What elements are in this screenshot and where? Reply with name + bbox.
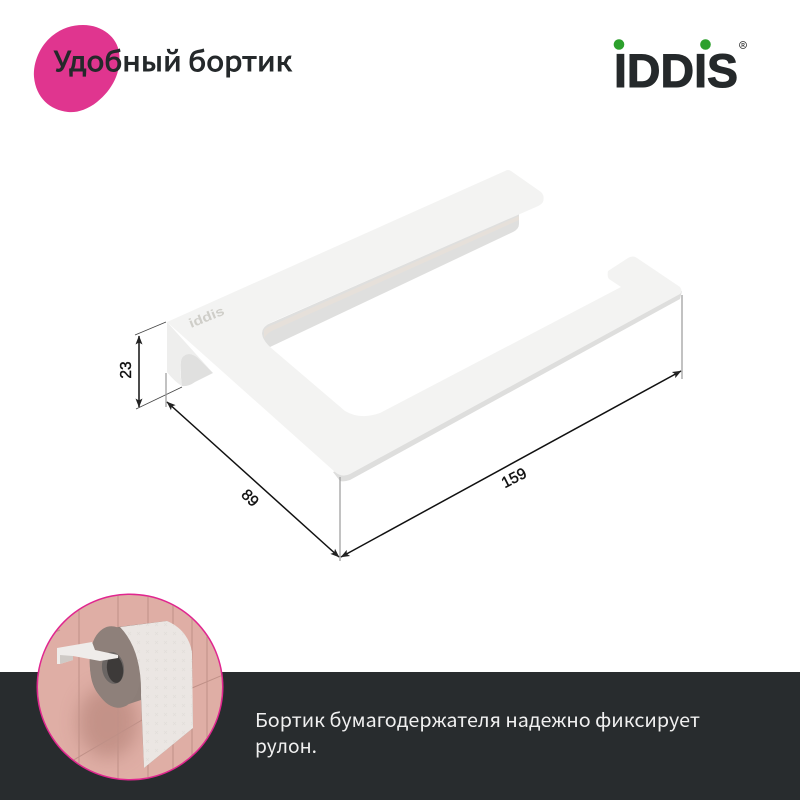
caption text: рулон.	[255, 732, 317, 759]
photo: toilet roll on holder	[36, 594, 224, 780]
holder top surface	[167, 170, 682, 476]
dimension 89	[166, 373, 340, 561]
dimension 159: 159	[499, 465, 530, 492]
bottom dark band	[0, 672, 800, 800]
logo: IDDIS: R	[741, 43, 745, 49]
photo tile wall	[38, 595, 222, 779]
photo holder	[57, 642, 118, 664]
heading: Удобный бортик	[34, 25, 292, 112]
heading: Удобный бортик: Удобный бортик	[54, 40, 292, 79]
caption text	[255, 706, 700, 759]
photo paper	[120, 621, 193, 768]
holder engraved brand: iddis	[187, 303, 226, 331]
holder front side	[167, 322, 213, 386]
holder inner groove	[262, 214, 519, 347]
holder lower edge thickness	[333, 291, 682, 481]
caption text: Бортик бумагодержателя надежно фиксирует	[255, 706, 700, 733]
dimension 159	[341, 295, 682, 557]
dimension 23	[118, 322, 182, 409]
dimension 89: 89	[238, 486, 262, 510]
dimension 23: 23	[118, 361, 135, 379]
photo roll	[90, 621, 193, 768]
logo: IDDIS: IDDIS	[614, 44, 738, 97]
product: white paper holder	[167, 170, 682, 481]
